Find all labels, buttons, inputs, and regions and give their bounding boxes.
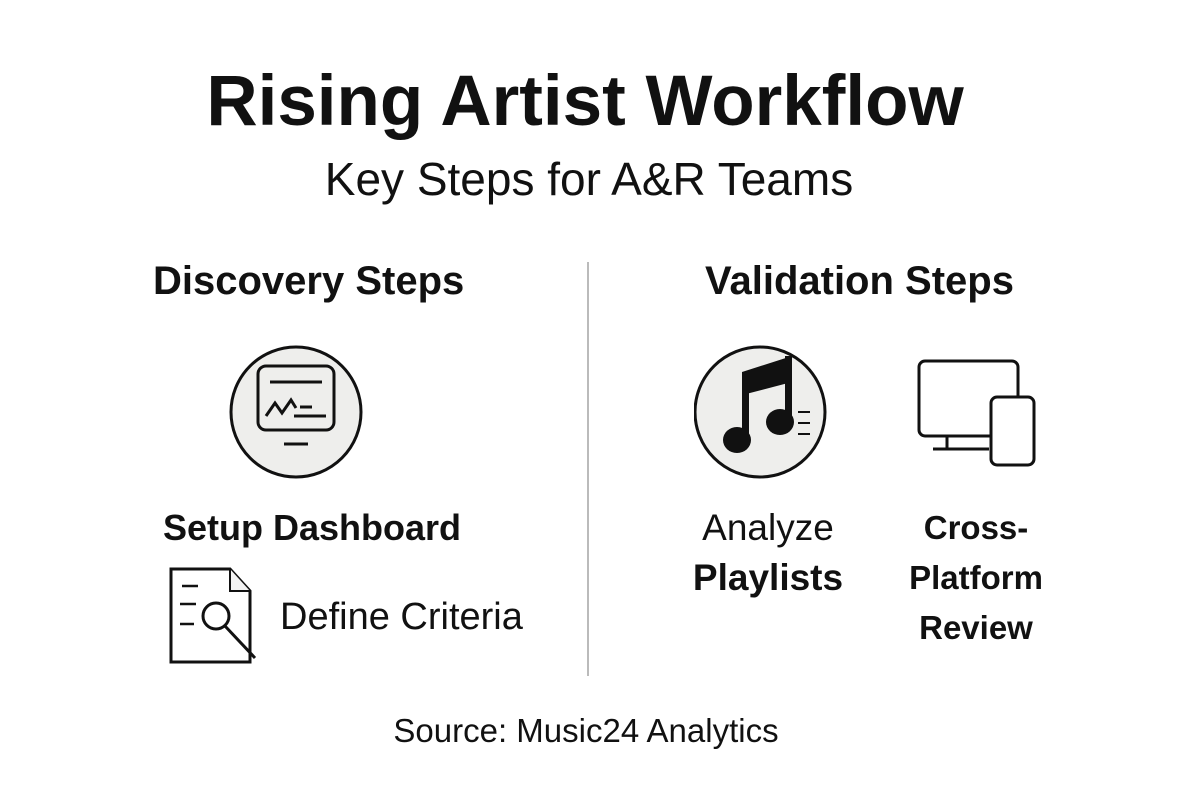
icon: devices [918, 360, 1036, 466]
label: analyze playlists: Playlists [693, 557, 843, 598]
heading: discovery: Discovery Steps [153, 259, 464, 303]
label: cross-platform review [909, 509, 1043, 646]
heading: validation: Validation Steps [705, 259, 1014, 303]
label: cross-platform review: Platform [909, 559, 1043, 596]
icon: document search [170, 568, 256, 664]
label: define criteria: Define Criteria [280, 596, 523, 638]
title: Rising Artist Workflow [206, 62, 964, 141]
source: Source: Music24 Analytics [393, 712, 779, 749]
subtitle: Key Steps for A&R Teams [325, 153, 853, 205]
label: setup dashboard: Setup Dashboard [163, 507, 461, 548]
icon: dashboard [230, 346, 362, 478]
label: cross-platform review: Review [919, 609, 1033, 646]
divider [587, 262, 589, 676]
label: cross-platform review: Cross- [924, 509, 1028, 546]
icon: music note [694, 346, 826, 478]
label: analyze playlists [693, 507, 843, 598]
label: analyze playlists: Analyze [702, 507, 834, 548]
